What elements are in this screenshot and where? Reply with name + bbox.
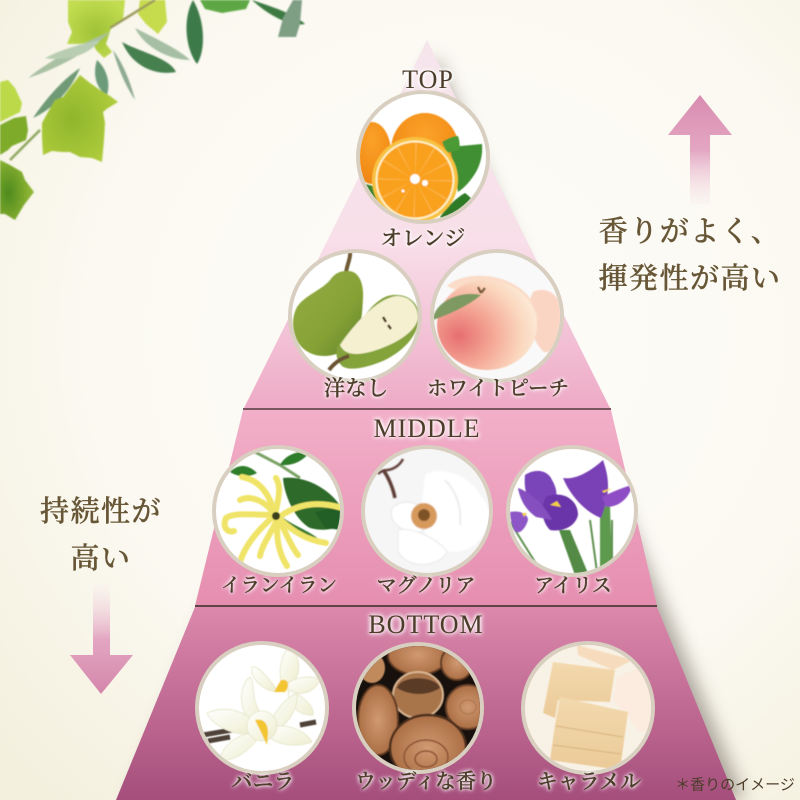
pyramid tier: top — [244, 40, 610, 408]
callout: base notes: 持続性が — [40, 496, 162, 528]
label: vanilla: バニラ — [232, 770, 294, 794]
callout: top notes: 揮発性が高い — [598, 263, 782, 295]
label: magnolia: マグノリア — [377, 575, 475, 597]
callout: base notes: 高い — [70, 543, 132, 575]
illustration: orange — [353, 90, 490, 224]
heading: MIDDLE: MIDDLE — [373, 414, 481, 443]
illustration: ylang-ylang — [212, 445, 345, 577]
illustration: wood logs — [352, 642, 484, 774]
illustration: iris — [506, 445, 638, 578]
illustration: pear — [288, 249, 422, 383]
label: iris: アイリス — [534, 575, 612, 597]
pyramid — [116, 40, 736, 800]
illustration: white peach — [430, 249, 565, 383]
label: orange: オレンジ — [381, 226, 465, 250]
callout: top notes — [598, 216, 782, 295]
label: white peach: ホワイトピーチ — [427, 378, 569, 400]
pyramid tier: middle — [195, 410, 657, 606]
heading: TOP: TOP — [402, 65, 454, 94]
foliage: leaves at top-left corner — [0, 0, 305, 220]
heading: BOTTOM: BOTTOM — [368, 610, 484, 639]
pyramid shadow — [130, 55, 745, 800]
label: ylang-ylang: イランイラン — [221, 575, 337, 596]
illustration: magnolia — [361, 445, 493, 577]
illustration: caramel — [521, 641, 655, 775]
label: caramel: キャラメル — [537, 770, 641, 794]
callout: base notes — [40, 496, 162, 575]
arrow: up, volatility — [668, 95, 732, 205]
note: image disclaimer: ＊香りのイメージ — [675, 776, 795, 794]
label: woody scent: ウッディな香り — [355, 771, 497, 793]
arrow: down, persistence — [70, 585, 133, 694]
callout: top notes: 香りがよく、 — [599, 216, 781, 248]
illustration: vanilla — [195, 641, 329, 775]
pyramid tier: bottom — [116, 607, 736, 800]
label: pear: 洋なし — [324, 376, 388, 400]
